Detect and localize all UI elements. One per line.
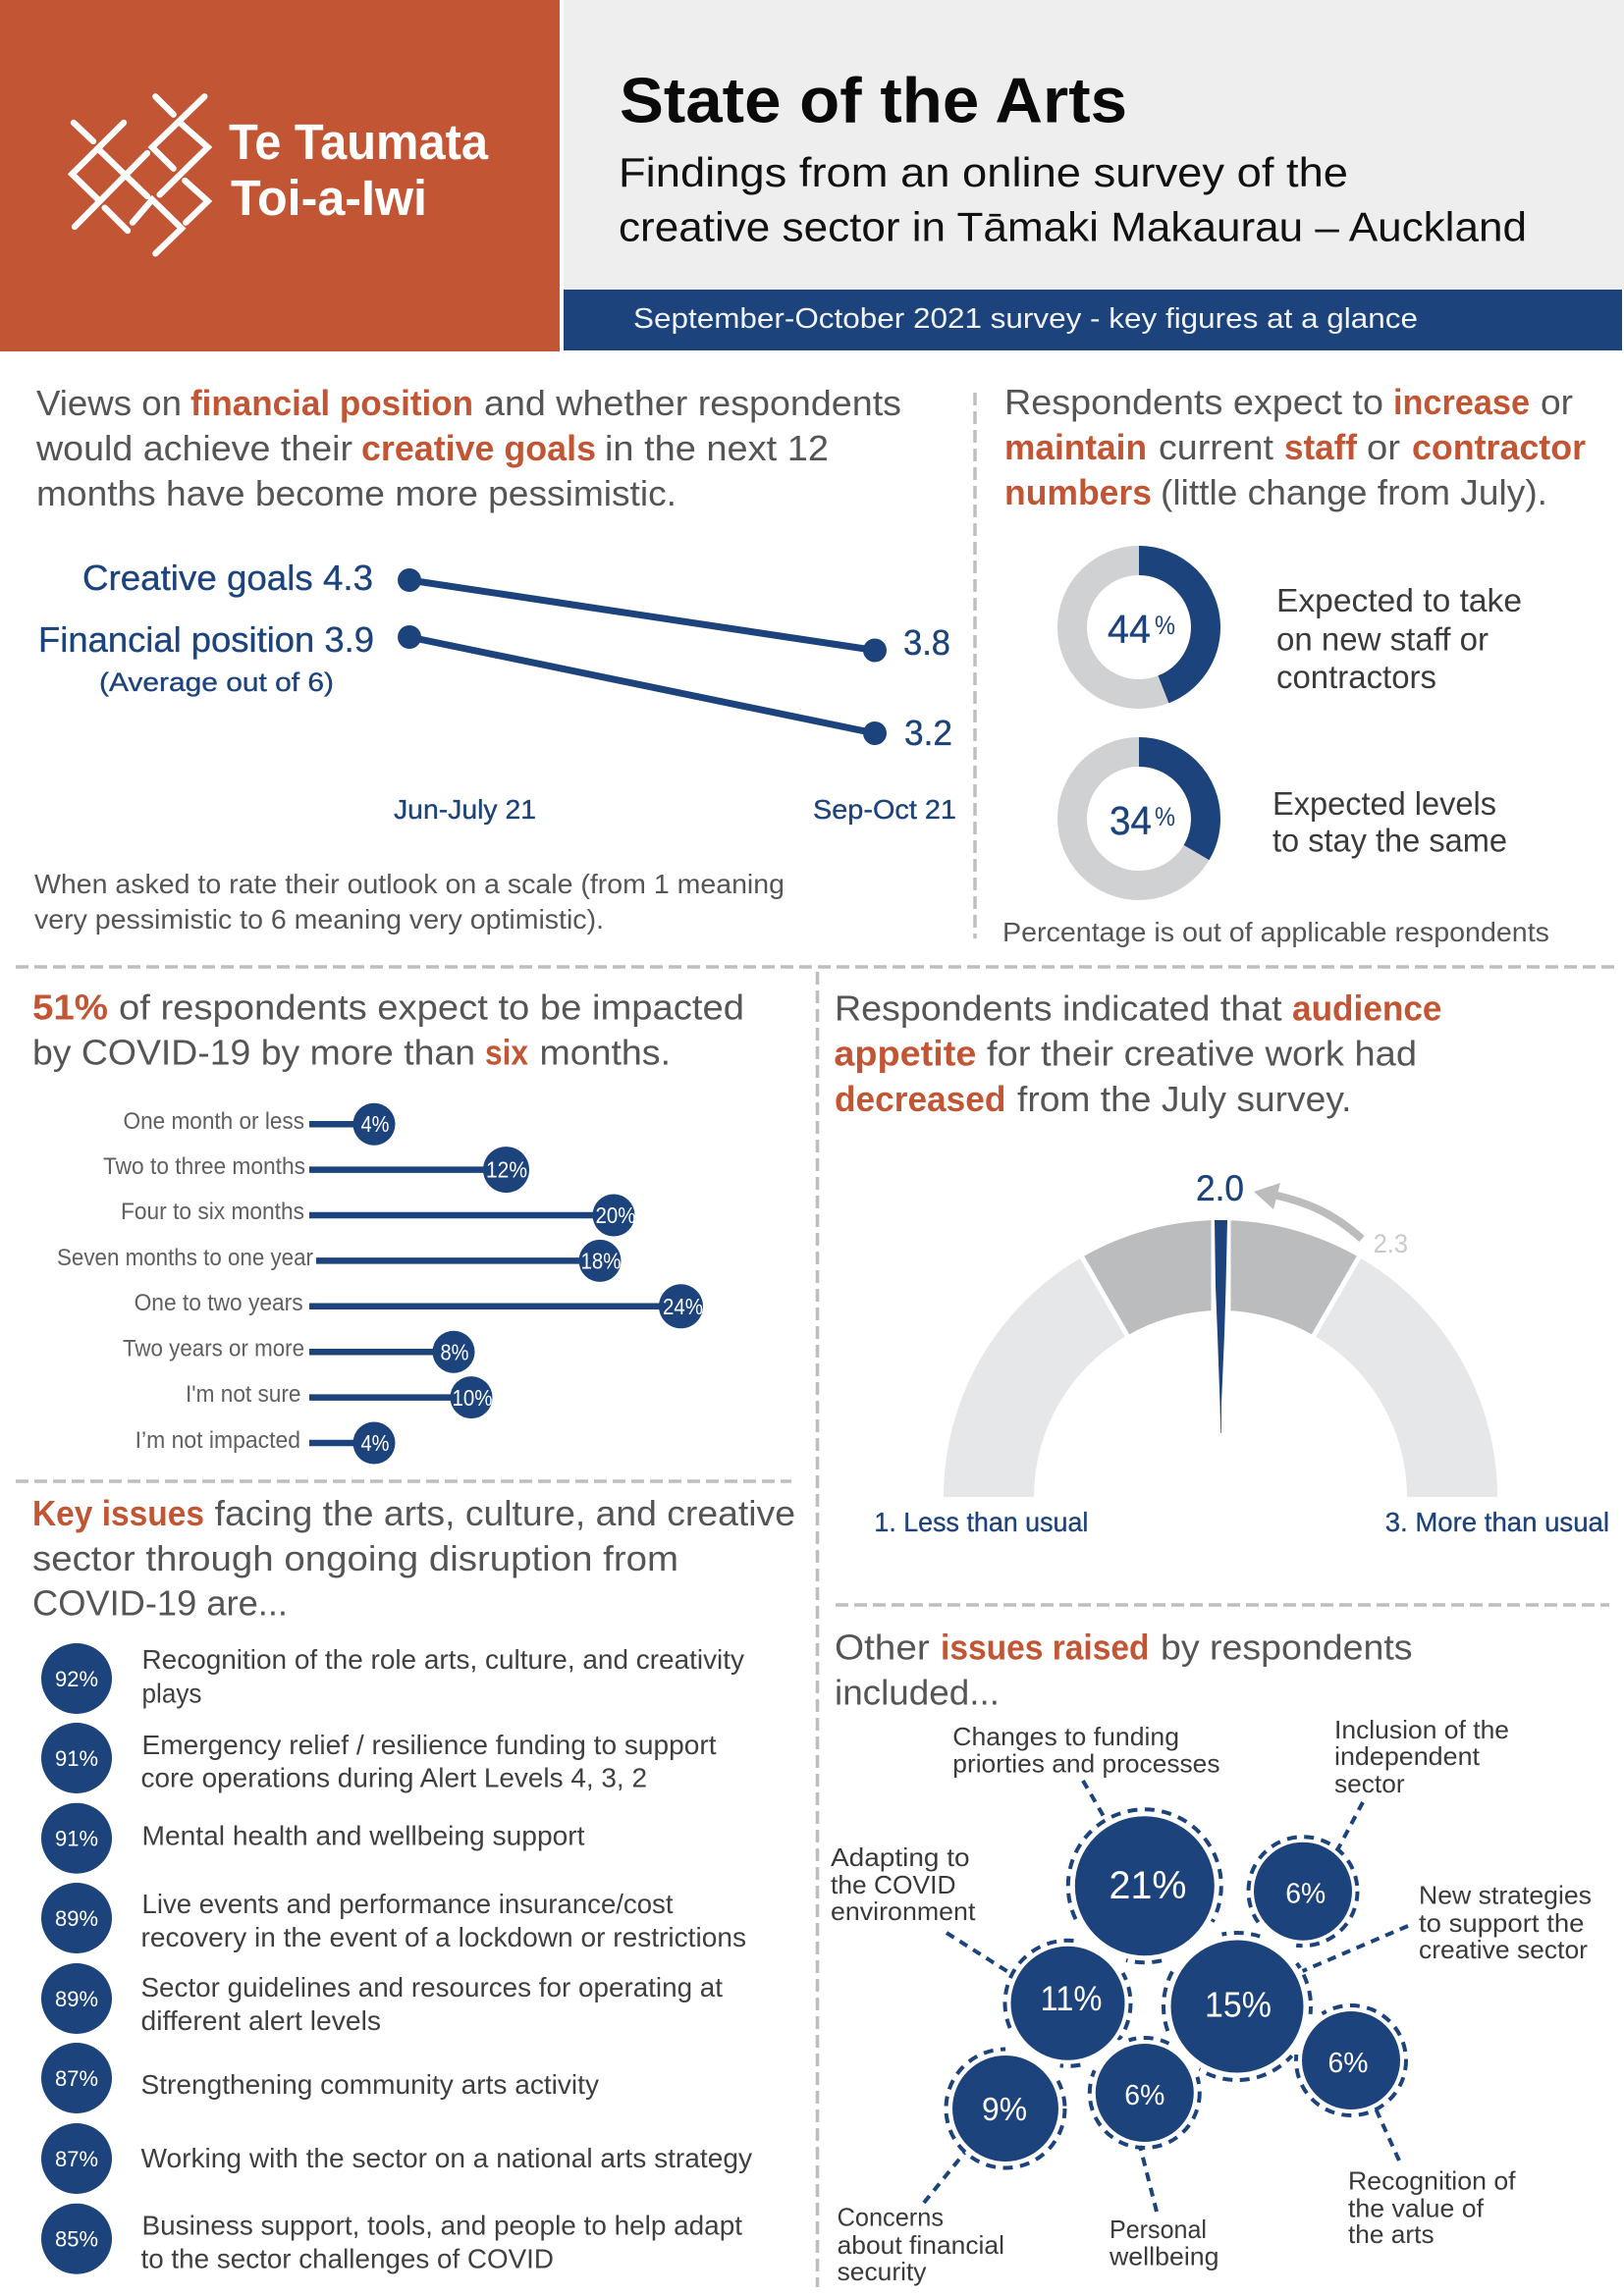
gauge chart: 2.0 (1196, 1168, 1244, 1208)
heading: audience appetite: audience (1292, 988, 1441, 1028)
heading: audience appetite: for their creative work had (987, 1033, 1417, 1073)
heading: staffing: or (1367, 427, 1400, 467)
bubble: new strategies 15%: 15% (1205, 1985, 1272, 2025)
slope chart: 3.2 (904, 713, 952, 753)
heading: outlook: would achieve their (35, 428, 352, 468)
issue: emergency relief 91%: Emergency relief / resilience funding to support (141, 1730, 717, 1760)
lollipop chart: 10% (452, 1385, 493, 1411)
arrow: change from 2.3 to 2.0 (1254, 1183, 1362, 1239)
heading: key issues: facing the arts, culture, and creative (215, 1493, 795, 1533)
heading: staffing: Respondents expect to (1004, 382, 1383, 422)
slope chart: Sep-Oct 21 (813, 794, 956, 825)
subtitle: Findings from an online survey of the (619, 149, 1348, 195)
bubble: personal wellbeing 6%: Personal (1110, 2215, 1207, 2244)
bubble: new strategies 15%: creative sector (1419, 1935, 1588, 1964)
label: 44%: contractors (1276, 659, 1436, 695)
heading: staffing: numbers (1004, 472, 1152, 512)
bubble: new strategies 15%: New strategies (1419, 1881, 1592, 1910)
panel: audience appetite (834, 988, 1609, 1537)
bubble: independent sector 6%: 6% (1285, 1879, 1326, 1910)
bubble: value of the arts 6%: the arts (1348, 2219, 1435, 2249)
donut: 44%: 44 (1108, 607, 1151, 652)
bubble: funding 21%: 21% (1110, 1864, 1186, 1907)
heading: covid impact (32, 988, 744, 1072)
issue: guidelines 89%: Sector guidelines and resources for operating at (141, 1972, 723, 2002)
donut: 44%: % (1155, 611, 1175, 640)
heading: staffing: contractor (1412, 427, 1586, 467)
logo panel (0, 0, 560, 351)
lollipop chart: 18% (581, 1249, 621, 1274)
lollipop chart: 4% (361, 1111, 389, 1137)
issue: mental health 91%: 91% (55, 1827, 98, 1851)
slope chart: 3.8 (903, 622, 950, 663)
slope chart (38, 558, 956, 825)
lollipop chart: One to two years (135, 1290, 303, 1316)
heading: staffing: or (1541, 382, 1573, 422)
gauge chart (874, 1168, 1609, 1537)
donut: 34% (1072, 752, 1206, 885)
bubble: financial security 9%: 9% (982, 2091, 1027, 2127)
heading: audience appetite: decreased (835, 1079, 1005, 1119)
bubble: covid environment 11%: Adapting to (831, 1842, 970, 1872)
issue: live events 89% (41, 1883, 746, 1953)
heading: staffing: staff (1284, 427, 1358, 467)
bubble: value of the arts 6%: the value of (1348, 2193, 1485, 2222)
heading: staffing: (little change from July). (1161, 472, 1547, 512)
panel: covid impact (32, 988, 744, 1465)
heading: staffing: maintain (1004, 427, 1147, 467)
note: scale explanation (34, 869, 785, 934)
bubble: personal wellbeing 6%: wellbeing (1109, 2241, 1219, 2270)
lollipop chart: Four to six months (121, 1199, 304, 1225)
bubble: financial security 9%: about financial (838, 2230, 1004, 2260)
issue: mental health 91%: Mental health and wellbeing support (141, 1820, 585, 1850)
issue: live events 89%: recovery in the event of a lockdown or restrictions (141, 1922, 746, 1952)
heading: key issues: sector through ongoing disruption from (32, 1538, 678, 1578)
label: 34% (1272, 785, 1507, 858)
panel: outlook (34, 383, 956, 934)
label: 44%: Expected to take (1276, 582, 1522, 618)
heading: covid impact: of respondents expect to be impacted (119, 988, 744, 1027)
lollipop chart: Two years or more (123, 1335, 304, 1362)
heading: audience appetite (834, 988, 1441, 1119)
issue: business support 85%: 85% (55, 2227, 98, 2252)
title panel (564, 0, 1624, 290)
lollipop chart: 4% (361, 1430, 389, 1456)
panel: header (0, 0, 1624, 351)
label: 34%: to stay the same (1272, 823, 1507, 858)
issue: recognition 92%: 92% (55, 1667, 98, 1691)
issue: recognition 92%: plays (141, 1679, 202, 1708)
heading: covid impact: by COVID-19 by more than (32, 1033, 475, 1072)
bubble: covid environment 11% (831, 1842, 1125, 2060)
issue: business support 85%: to the sector challenges of COVID (141, 2244, 554, 2273)
bubble: value of the arts 6% (1302, 2011, 1516, 2249)
logo wordmark: Toi-a-Iwi (231, 170, 427, 226)
bubble: financial security 9% (838, 2056, 1058, 2286)
logo wordmark (229, 114, 489, 226)
title: State of the Arts (620, 65, 1127, 135)
heading: staffing: current (1159, 427, 1273, 467)
heading: other issues: included... (835, 1673, 1000, 1713)
heading: outlook (35, 383, 901, 513)
gauge chart: 3. More than usual (1385, 1507, 1609, 1537)
donut: 44% (1072, 561, 1206, 694)
slope chart: (Average out of 6) (99, 667, 334, 697)
bubble: covid environment 11%: the COVID (831, 1870, 956, 1899)
note: percentage base: Percentage is out of applicable respondents (1002, 917, 1549, 947)
note: scale explanation: very pessimistic to 6 meaning very optimistic). (34, 904, 604, 934)
bubble: new strategies 15% (1170, 1881, 1592, 2073)
issue: community arts 87%: 87% (55, 2066, 98, 2091)
lollipop chart (57, 1103, 703, 1465)
survey date banner: September-October 2021 survey - key figures at a glance (633, 303, 1418, 335)
lollipop chart: I’m not impacted (135, 1427, 300, 1454)
issue: emergency relief 91%: core operations during Alert Levels 4, 3, 2 (141, 1763, 647, 1792)
heading: staffing (1004, 382, 1586, 512)
bubble: value of the arts 6%: Recognition of (1348, 2166, 1516, 2196)
survey date banner (564, 290, 1622, 350)
heading: audience appetite: Respondents indicated that (835, 988, 1282, 1028)
slope chart: Creative goals 4.3 (82, 558, 373, 598)
bubble: financial security 9%: security (838, 2257, 927, 2286)
lollipop chart: Seven months to one year (57, 1245, 313, 1271)
bubble: financial security 9%: Concerns (838, 2203, 944, 2232)
dashed bubble rings (947, 1809, 1406, 2167)
issue: guidelines 89%: different alert levels (141, 2005, 381, 2036)
lollipop chart: 20% (595, 1202, 636, 1228)
heading: audience appetite: from the July survey. (1017, 1079, 1351, 1119)
lollipop chart: Two to three months (103, 1153, 305, 1180)
panel: staffing (1002, 382, 1586, 947)
logo wordmark: Te Taumata (229, 114, 489, 170)
bubble: personal wellbeing 6%: 6% (1124, 2080, 1164, 2111)
issue: guidelines 89% (41, 1963, 723, 2036)
issue: recognition 92%: Recognition of the role arts, culture, and creativity (141, 1644, 744, 1675)
subtitle (619, 149, 1527, 249)
heading: outlook: financial position (190, 383, 473, 423)
heading: outlook: and whether respondents (484, 383, 901, 423)
gauge chart: 2.3 (1374, 1229, 1408, 1258)
heading: other issues (835, 1627, 1412, 1713)
issue: guidelines 89%: 89% (55, 1987, 98, 2011)
issue: community arts 87% (41, 2043, 599, 2113)
bubble: covid environment 11%: 11% (1041, 1980, 1102, 2018)
heading: outlook: Views on (36, 383, 182, 423)
label: 44%: on new staff or (1276, 620, 1489, 658)
heading: outlook: creative goals (361, 428, 596, 468)
issue: national strategy 87%: 87% (55, 2147, 98, 2171)
issue: national strategy 87%: Working with the sector on a national arts strategy (141, 2143, 752, 2173)
gauge needle (1215, 1220, 1227, 1433)
bubble: covid environment 11%: environment (831, 1896, 976, 1926)
lollipop chart: I'm not sure (186, 1381, 300, 1408)
panel: other issues (831, 1627, 1592, 2286)
gauge chart: 1. Less than usual (874, 1507, 1088, 1537)
heading: key issues: Key issues (32, 1493, 204, 1533)
bubble: independent sector 6%: independent (1334, 1741, 1481, 1771)
issue: live events 89%: Live events and performance insurance/cost (141, 1889, 674, 1919)
issue: business support 85%: Business support, tools, and people to help adapt (141, 2211, 742, 2241)
donut: 34%: 34 (1110, 798, 1152, 843)
bubble: funding 21%: Changes to funding (952, 1722, 1179, 1751)
icon: woven logo mark (72, 96, 208, 253)
bubble: personal wellbeing 6% (1096, 2044, 1219, 2270)
heading: outlook: months have become more pessimistic. (36, 473, 677, 513)
panel: key issues (32, 1493, 795, 2274)
issue: live events 89%: 89% (55, 1906, 98, 1931)
bubble: independent sector 6%: Inclusion of the (1334, 1715, 1509, 1744)
lollipop chart: 24% (663, 1294, 703, 1319)
issue: community arts 87%: Strengthening community arts activity (141, 2069, 599, 2100)
heading: staffing: increase (1393, 382, 1530, 422)
bubble: funding 21%: priorties and processes (952, 1748, 1219, 1778)
bubble: independent sector 6% (1254, 1715, 1509, 1941)
issue: emergency relief 91% (41, 1723, 717, 1793)
heading: other issues: Other (835, 1627, 930, 1667)
heading: key issues (32, 1493, 795, 1624)
bubble: funding 21% (952, 1722, 1219, 1955)
heading: audience appetite: appetite (834, 1033, 976, 1073)
issue: emergency relief 91%: 91% (55, 1746, 98, 1771)
slope chart: Jun-July 21 (394, 794, 536, 825)
lollipop chart: 8% (440, 1339, 469, 1364)
label: 34%: Expected levels (1272, 785, 1496, 822)
heading: outlook: in the next 12 (605, 428, 829, 468)
bubble: new strategies 15%: to support the (1419, 1908, 1585, 1938)
lollipop chart: One month or less (124, 1108, 304, 1135)
heading: covid impact: 51% (32, 988, 108, 1027)
issue: mental health 91% (41, 1803, 585, 1874)
lollipop chart: 12% (486, 1156, 527, 1182)
heading: key issues: COVID-19 are... (32, 1583, 288, 1624)
slope chart: Financial position 3.9 (38, 619, 374, 660)
issue: recognition 92% (41, 1643, 744, 1714)
bubble: value of the arts 6%: 6% (1327, 2048, 1369, 2079)
issue: business support 85% (41, 2204, 742, 2274)
note: scale explanation: When asked to rate their outlook on a scale (from 1 meaning (34, 869, 785, 899)
heading: covid impact: six (485, 1033, 528, 1072)
heading: covid impact: months. (540, 1033, 671, 1072)
heading: other issues: by respondents (1161, 1627, 1412, 1667)
bubble: independent sector 6%: sector (1334, 1769, 1405, 1798)
donut: 34%: % (1155, 802, 1175, 831)
issue: national strategy 87% (41, 2123, 752, 2194)
subtitle: creative sector in Tāmaki Makaurau – Auckland (619, 204, 1527, 249)
label: 44% (1276, 582, 1522, 695)
heading: other issues: issues raised (941, 1627, 1149, 1667)
